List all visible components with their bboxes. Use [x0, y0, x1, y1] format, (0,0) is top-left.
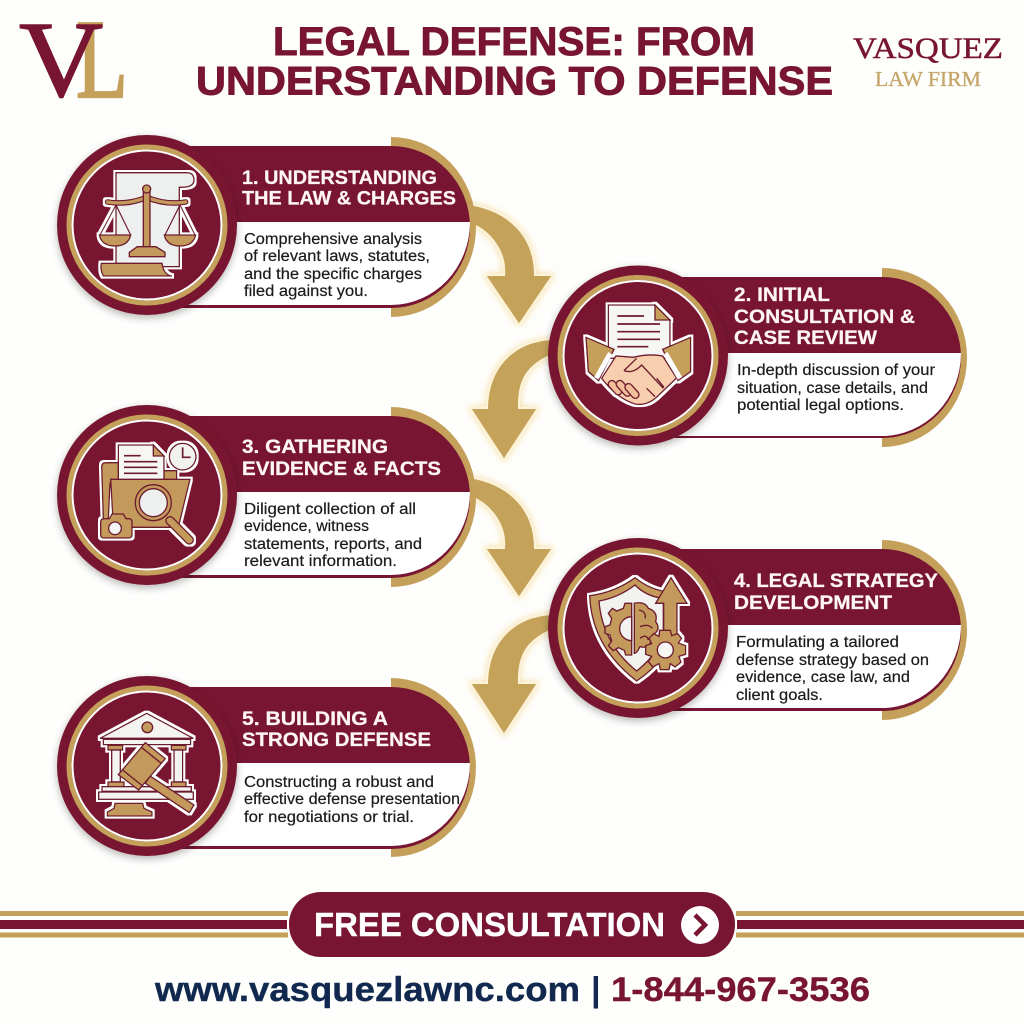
- text: step 2 description: potential legal options.: [737, 397, 904, 414]
- heading: step 2: [734, 284, 915, 349]
- text: step 5 description: [244, 774, 460, 826]
- title: LEGAL DEFENSE: FROM: [273, 20, 755, 64]
- text: step 2 description: In-depth discussion of your: [737, 362, 935, 379]
- contact line: www.vasquezlawnc.com: [154, 971, 580, 1009]
- text: step 4 description: defense strategy based on: [736, 652, 929, 669]
- logo: Vasquez Law Firm wordmark: [853, 32, 1003, 91]
- contact line: [154, 971, 870, 1009]
- title: [196, 20, 833, 104]
- heading: step 5: 5. BUILDING A: [242, 708, 388, 730]
- text: step 1 description: of relevant laws, statutes,: [244, 248, 430, 265]
- text: step 3 description: statements, reports, and: [244, 536, 422, 553]
- text: step 3 description: relevant information.: [244, 553, 397, 570]
- heading: step 5: [242, 708, 431, 751]
- heading: step 2: CASE REVIEW: [734, 327, 878, 349]
- text: step 1 description: Comprehensive analysis: [244, 231, 422, 248]
- arrow: step 3 to step 4: [468, 477, 553, 598]
- contact line: 1-844-967-3536: [611, 971, 870, 1009]
- text: step 1 description: filed against you.: [244, 283, 368, 300]
- heading: step 3: 3. GATHERING: [242, 436, 388, 458]
- text: step 5 description: Constructing a robust and: [244, 774, 434, 791]
- text: step 4 description: Formulating a tailored: [736, 634, 899, 651]
- text: step 3 description: evidence, witness: [244, 518, 369, 535]
- heading: step 4: [734, 570, 938, 614]
- right stripes: [736, 911, 1024, 938]
- text: step 5 description: effective defense presentation: [244, 791, 460, 808]
- text: step 3 description: [244, 501, 422, 570]
- icon: folder, magnifier, clock and camera: [101, 443, 196, 540]
- contact line: |: [591, 971, 601, 1009]
- text: step 3 description: Diligent collection of all: [244, 501, 416, 518]
- text: step 4 description: client goals.: [736, 687, 823, 704]
- heading: step 5: STRONG DEFENSE: [242, 729, 431, 751]
- arrow: step 2 to step 3: [470, 339, 552, 460]
- panel: step 4 legal strategy development: [548, 538, 967, 720]
- icon: shield with gear, brain and arrow: [590, 578, 687, 681]
- logo: VL monogram: L: [76, 0, 128, 122]
- logo: VL monogram: V: [19, 1, 103, 120]
- heading: step 1: 1. UNDERSTANDING: [242, 167, 437, 189]
- icon: courthouse and gavel: [99, 713, 194, 816]
- heading: step 4: DEVELOPMENT: [734, 592, 892, 614]
- icon: scales of justice on scroll: [99, 173, 196, 276]
- icon: chevron circle: [681, 906, 719, 944]
- heading: step 2: 2. INITIAL: [734, 284, 830, 306]
- heading: step 1: THE LAW & CHARGES: [242, 188, 456, 210]
- arrow: step 4 to step 5: [470, 614, 552, 735]
- logo: Vasquez Law Firm wordmark: LAW FIRM: [875, 67, 981, 91]
- logo: Vasquez Law Firm wordmark: VASQUEZ: [853, 32, 1003, 65]
- text: step 4 description: [736, 634, 929, 704]
- text: step 5 description: for negotiations or trial.: [244, 809, 414, 826]
- text: step 2 description: [737, 362, 935, 414]
- title: UNDERSTANDING TO DEFENSE: [196, 60, 833, 104]
- left stripes: [0, 911, 288, 938]
- icon: handshake with document: [586, 305, 691, 404]
- heading: step 1: [242, 167, 456, 210]
- arrow: step 1 to step 2: [468, 204, 553, 325]
- heading: step 3: EVIDENCE & FACTS: [242, 458, 441, 480]
- text: step 1 description: [244, 231, 430, 300]
- panel: step 2 initial consultation and case review: [548, 266, 967, 447]
- text: step 1 description: and the specific charges: [244, 266, 422, 283]
- panel: step 1 understanding the law and charges: [57, 135, 476, 317]
- logo: VL monogram: [19, 0, 128, 122]
- button: free consultation: [289, 892, 735, 957]
- heading: step 4: 4. LEGAL STRATEGY: [734, 570, 938, 592]
- text: step 4 description: evidence, case law, and: [736, 669, 910, 686]
- panel: step 5 building a strong defense: [57, 676, 476, 857]
- heading: step 3: [242, 436, 441, 480]
- button: free consultation: FREE CONSULTATION: [314, 906, 665, 943]
- panel: step 3 gathering evidence and facts: [57, 405, 476, 587]
- text: step 2 description: situation, case details, and: [737, 380, 928, 397]
- heading: step 2: CONSULTATION &: [734, 306, 915, 328]
